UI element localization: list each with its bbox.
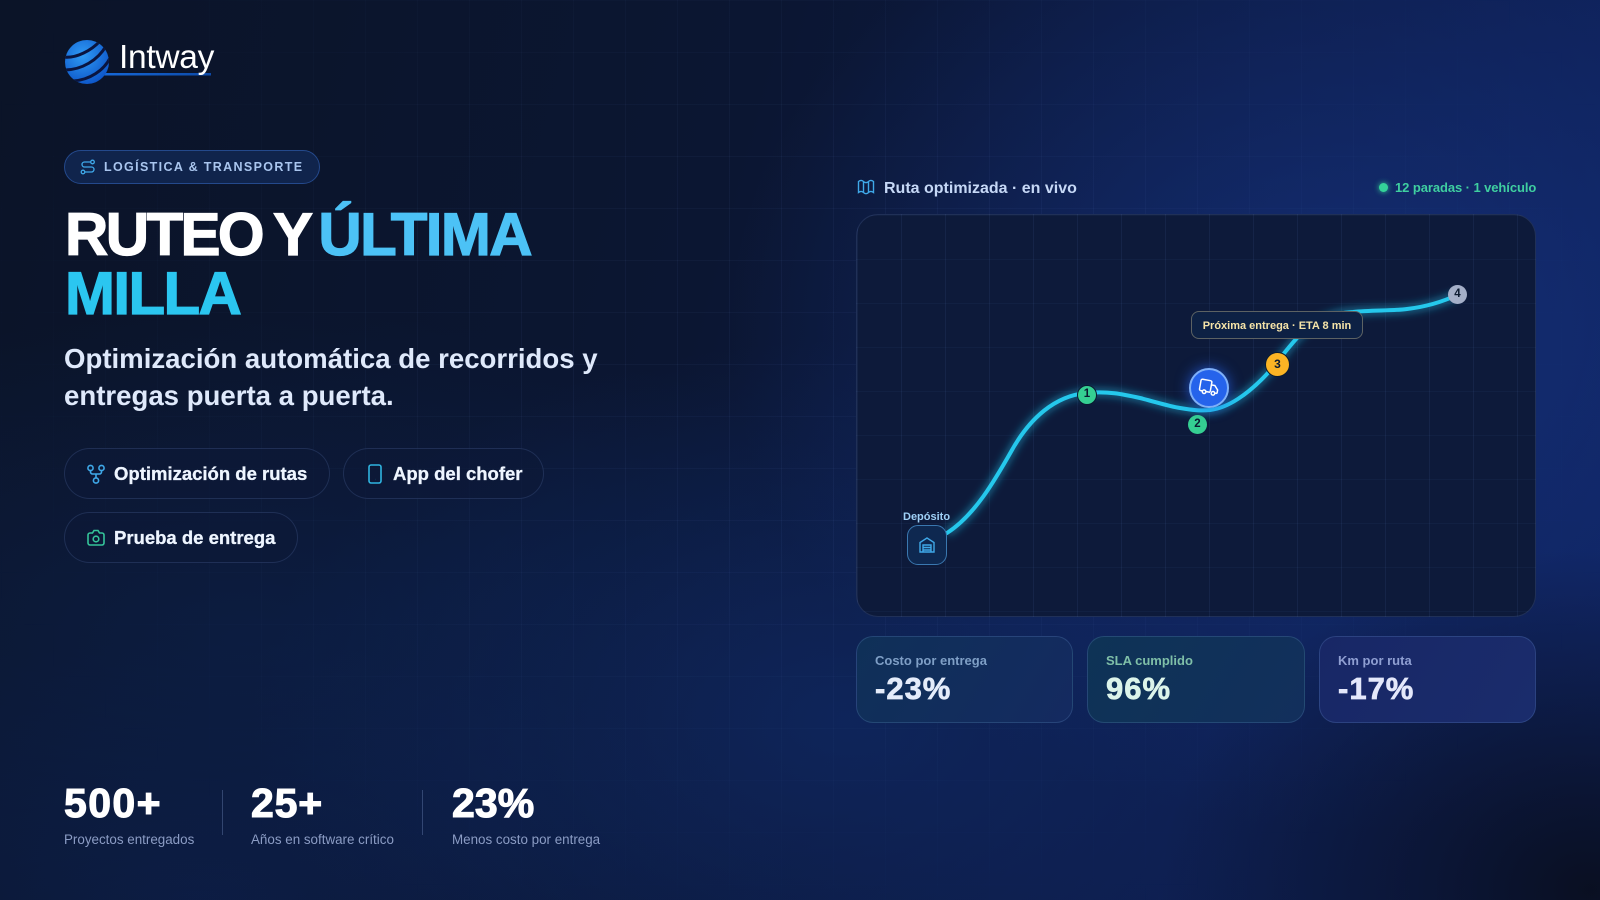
chip: Prueba de entrega: Prueba de entrega bbox=[114, 527, 275, 548]
icon: depot bbox=[907, 525, 947, 565]
panel: route map bbox=[856, 214, 1536, 617]
KPI: km por ruta bbox=[1319, 636, 1536, 723]
stat: 25+: 25+ bbox=[251, 780, 323, 826]
stop 1: 1 bbox=[1084, 388, 1090, 400]
icon: route bbox=[80, 160, 95, 174]
stat: 500+ bbox=[64, 780, 194, 847]
depot label: Depósito bbox=[903, 511, 950, 523]
stop 3: 3 bbox=[1274, 357, 1281, 371]
title: MILLA bbox=[65, 260, 240, 327]
stat: 500+: 500+ bbox=[64, 780, 162, 826]
status: 12 paradas: 12 paradas · 1 vehículo bbox=[1395, 180, 1536, 195]
route line bbox=[943, 289, 1457, 539]
title bbox=[65, 200, 532, 327]
chip: Optimización de rutas bbox=[64, 448, 330, 499]
subtitle: entregas puerta a puerta. bbox=[64, 380, 394, 411]
stat: 23% bbox=[422, 780, 600, 847]
chip: App del chofer bbox=[343, 448, 544, 499]
stat: 25+: Años en software crítico bbox=[251, 832, 394, 847]
KPI: costo por entrega bbox=[856, 636, 1073, 723]
badge: Logística & Transporte: LOGÍSTICA & TRANSPORTE bbox=[104, 160, 303, 174]
vehicle marker bbox=[1189, 368, 1229, 408]
map header: Ruta optimizada en vivo: Ruta optimizada · en vivo bbox=[884, 180, 1077, 197]
chip: Prueba de entrega bbox=[64, 512, 298, 563]
badge: Logística & Transporte bbox=[64, 150, 320, 184]
subtitle bbox=[64, 343, 598, 411]
stop 4: 4 bbox=[1454, 288, 1461, 300]
stop 2 bbox=[1188, 415, 1207, 434]
stop 2: 2 bbox=[1194, 418, 1201, 430]
stop 4 bbox=[1448, 285, 1467, 304]
KPI: costo por entrega: -23% bbox=[875, 671, 951, 706]
chip: Optimización de rutas: Optimización de rutas bbox=[114, 463, 307, 484]
KPI: km por ruta: Km por ruta bbox=[1338, 653, 1412, 668]
logo: Intway bbox=[65, 39, 214, 84]
subtitle: Optimización automática de recorridos y bbox=[64, 343, 598, 374]
stat: 25+ bbox=[222, 780, 394, 847]
stat: 500+: Proyectos entregados bbox=[64, 832, 194, 847]
logo: Intway: Intway bbox=[119, 39, 214, 76]
chip: App del chofer: App del chofer bbox=[393, 463, 523, 484]
KPI: SLA cumplido: SLA cumplido bbox=[1106, 653, 1193, 668]
title: RUTEO Y ÚLTIMA bbox=[65, 201, 531, 268]
stop 3 bbox=[1265, 352, 1290, 377]
stat: 23%: 23% bbox=[452, 780, 534, 826]
KPI: SLA cumplido: 96% bbox=[1106, 671, 1171, 706]
stop 1 bbox=[1077, 385, 1097, 405]
KPI: costo por entrega: Costo por entrega bbox=[875, 653, 987, 668]
tooltip: próxima entrega bbox=[1191, 311, 1363, 339]
stat: 23%: Menos costo por entrega bbox=[452, 832, 600, 847]
tooltip: próxima entrega: Próxima entrega · ETA 8 min bbox=[1203, 320, 1351, 332]
KPI: SLA cumplido bbox=[1087, 636, 1305, 723]
KPI: km por ruta: -17% bbox=[1338, 671, 1414, 706]
